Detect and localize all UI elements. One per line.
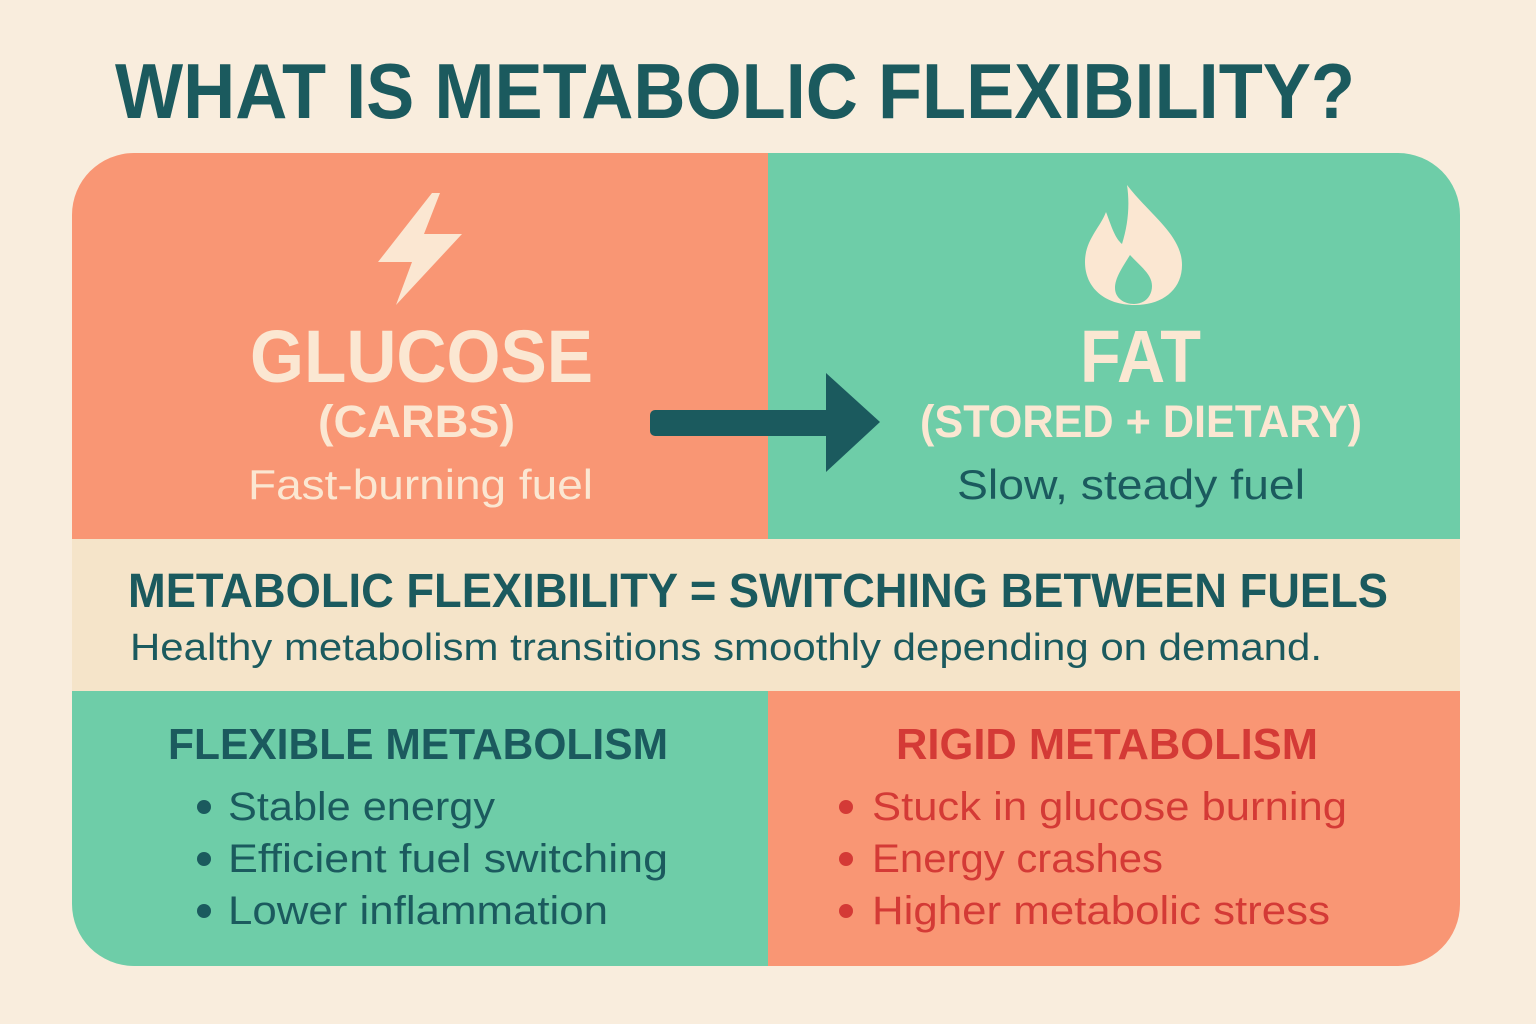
panel: definition band — [72, 539, 1460, 691]
panel: glucose — [72, 153, 768, 539]
rigid bullets — [839, 785, 1347, 933]
flexible heading: FLEXIBLE METABOLISM — [168, 720, 668, 769]
rigid bullets: Higher metabolic stress — [872, 889, 1330, 933]
panel: rigid metabolism — [768, 691, 1460, 966]
rigid bullets: Energy crashes — [872, 837, 1163, 881]
definition heading: METABOLIC FLEXIBILITY = SWITCHING BETWEEN FUELS — [128, 565, 1388, 618]
icon: lightning — [378, 193, 462, 305]
flexible bullets: Efficient fuel switching — [228, 837, 668, 881]
card — [72, 153, 1460, 966]
glucose heading: GLUCOSE — [250, 315, 593, 398]
flexible bullets — [197, 791, 666, 924]
flexible bullets: Stable energy — [228, 785, 495, 829]
title: WHAT IS METABOLIC FLEXIBILITY? — [115, 47, 1355, 135]
panel: fat — [768, 153, 1460, 539]
arrow — [650, 373, 880, 472]
glucose subtitle: (CARBS) — [318, 396, 515, 447]
glucose description: Fast-burning fuel — [248, 461, 593, 508]
rigid bullets: Stuck in glucose burning — [872, 785, 1347, 829]
fat heading: FAT — [1080, 315, 1201, 398]
fat subtitle: (STORED + DIETARY) — [920, 396, 1362, 447]
definition text: Healthy metabolism transitions smoothly depending on demand. — [130, 627, 1322, 669]
flexible bullets: Lower inflammation — [228, 889, 608, 933]
rigid heading: RIGID METABOLISM — [896, 720, 1318, 769]
icon: flame — [1085, 185, 1182, 305]
fat description: Slow, steady fuel — [957, 461, 1305, 508]
panel: flexible metabolism — [72, 691, 768, 966]
